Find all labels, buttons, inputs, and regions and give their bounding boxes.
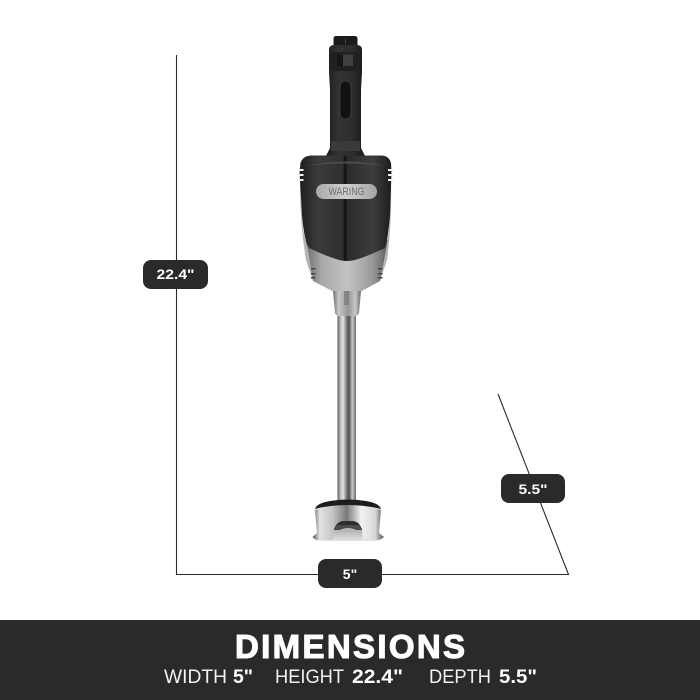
vent slots — [298, 169, 394, 278]
blender shaft — [338, 316, 356, 502]
dimension lines — [176, 55, 568, 574]
blender silver base — [305, 240, 389, 292]
width label — [318, 559, 382, 588]
width label: 5" — [343, 566, 357, 582]
footer measurements — [164, 667, 537, 688]
depth label: 5.5" — [518, 481, 548, 497]
footer measurements: HEIGHT — [275, 667, 344, 688]
depth label — [501, 474, 565, 503]
height label: 22.4" — [156, 266, 194, 282]
silver side strips — [300, 180, 391, 281]
guard chrome dome — [312, 504, 384, 541]
blender top cap — [334, 36, 358, 46]
footer band — [0, 620, 700, 700]
footer measurements: 22.4" — [352, 667, 403, 688]
guard black lid — [315, 500, 381, 509]
motor body top highlight — [306, 162, 386, 166]
brand nameplate: WARING — [328, 186, 364, 198]
blender black motor body — [300, 156, 392, 261]
footer title: DIMENSIONS — [235, 628, 465, 665]
immersion blender product — [298, 36, 394, 541]
footer measurements: DEPTH — [429, 667, 491, 688]
footer measurements: WIDTH — [164, 667, 227, 688]
blade guard foot — [312, 500, 384, 541]
height label — [143, 260, 208, 289]
blender handle — [326, 45, 365, 156]
brand nameplate — [316, 184, 377, 199]
guard arch opening — [334, 521, 362, 530]
guard floor shadow — [322, 528, 374, 541]
blender collar — [333, 291, 361, 316]
footer measurements: 5.5" — [499, 667, 537, 688]
footer measurements: 5" — [233, 667, 253, 688]
